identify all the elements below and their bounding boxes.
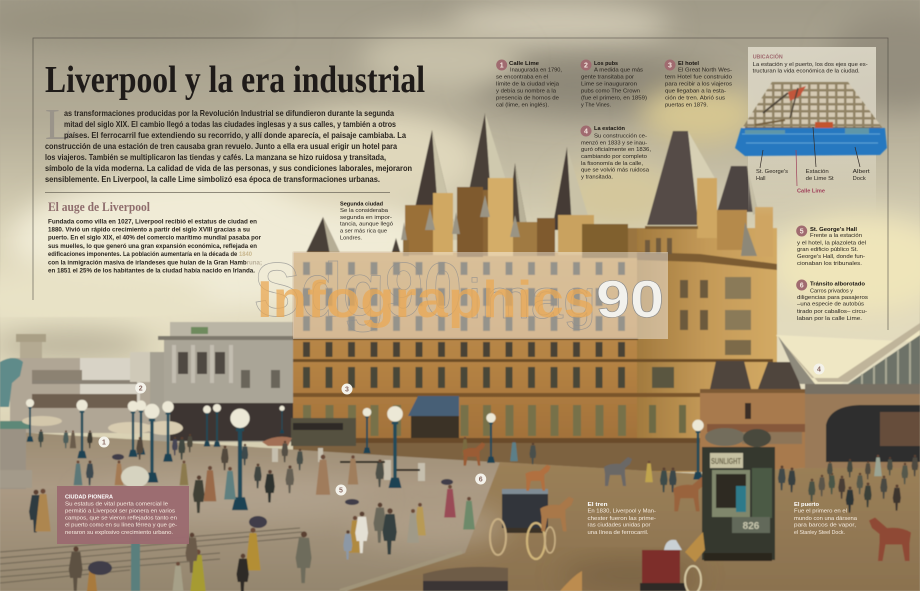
callout: Ciudad pionera: CIUDAD PIONERA [65,494,113,500]
text block: Segunda ciudad [340,202,393,241]
note 1: Calle Lime: se encontraba en el [496,74,548,80]
note 2: Los pubs: gente transitaba por [581,74,634,80]
panel: Ubicación locator map: UBICACIÓN [753,52,783,60]
motor car top [423,567,508,591]
panel: Ubicación locator map: La estación y el puerto, los dos ejes que es- [753,62,868,68]
text block: Segunda ciudad: tancia, aunque llegó [340,222,393,228]
note 3: El hotel: para recibir a los viajeros [665,81,732,87]
badge 5: 5 [800,228,804,236]
carriage [490,489,555,559]
intro text block: países. El ferrocarril fue extendiendo su recorrido, y allí donde aparecía, el paisaje cambiaba. La [64,131,406,140]
note 1: Calle Lime: Inaugurada en 1790, [510,67,562,73]
note 4: La estación: cambiando por completo [581,154,647,160]
map labels: Dock [853,176,866,182]
note 6: Tránsito alborotado: –una especie de autobús [797,302,864,308]
watermark: imag [468,267,596,330]
note 3: El hotel: que llegaban a la esta- [665,88,726,94]
note 2: Los pubs: pubs como The Crown [581,88,640,94]
caption: El puerto: Fue el primero en el [794,509,847,515]
text block: Segunda ciudad: Londres. [340,235,362,241]
map labels: St. George's [756,169,788,175]
note 1: Calle Lime: límite de la ciudad vieja [496,81,560,87]
intro text block: mitad del siglo XIX. El cambio llegó a todas las ciudades inglesas y a sus calles, y también a otros [64,120,396,129]
far-left white building [10,334,150,433]
text block: El auge de Liverpool: en 1851 el 25% de los habitantes de la ciudad había nacido en Irlanda. [48,268,255,275]
caption: El tren: El tren [588,502,608,508]
callout: Ciudad pionera: el puerto como en su línea férrea y que ge- [65,523,177,529]
intro text block: construcción de una estación de tren causaba gran revuelo. Junto a ella era usual erigir un hotel para [45,142,397,151]
note 6: Tránsito alborotado [796,280,868,322]
note 4: La estación: La estación [594,126,626,132]
note 2: Los pubs: A medida que más [594,67,643,73]
text block: Segunda ciudad: Se la consideraba [340,208,389,214]
map leader lines [760,127,860,186]
caption: El puerto: el Stanley Steel Dock. [794,530,845,536]
caption: El tren [588,502,656,536]
map labels [756,169,870,195]
panel: Ubicación locator map [735,47,887,217]
note 3: El hotel: tern Hotel fue construido [665,74,732,80]
badge 4: 4 [584,128,588,136]
cart with boxes [560,532,705,591]
street lamps [26,399,704,510]
text block: Segunda ciudad: Segunda ciudad [340,202,384,208]
badge 1: 1 [500,62,504,70]
note 5: St. George's Hall: Frente a la estación [810,233,862,239]
note 2: Los pubs: Lime se inauguraron [581,81,637,87]
text block: El auge de Liverpool: edificaciones imponentes. La población aumentaría en la década de 1840 [48,251,252,258]
railway station shed [776,323,920,478]
note 6: Tránsito alborotado: Carros privados y [810,288,853,294]
foreground lamp [121,466,149,591]
note 6: Tránsito alborotado: tirado por caballos– circu- [797,309,867,315]
note 5: St. George's Hall: George's Hall, donde fun- [797,254,865,260]
note 1: Calle Lime: cal (lime, en inglés). [496,103,549,109]
note 2: Los pubs: Los pubs [594,61,618,67]
text block: El auge de Liverpool: con la inmigración masiva de irlandeses que huían de la Gran Hambruna; [48,259,262,266]
umbrellas [88,454,453,575]
right wing and dormers [700,361,807,472]
drop cap: L [45,100,72,149]
scene number markers: 4 [817,366,821,374]
caption: El puerto: mundo con una dársena [794,516,857,522]
text block: El auge de Liverpool: 1880. Vivió un rápido crecimiento a partir del siglo XVIII gracias a su [48,226,250,234]
text block: Segunda ciudad: segunda en impor- [340,215,392,221]
caption: El puerto: El puerto [794,502,820,508]
note 6: Tránsito alborotado: laban por la calle Lime. [797,316,863,322]
intro text block: los viajeros. También se multiplicaron las tiendas y cafés. La manzana se hizo ruidosa y transitada, [45,153,386,162]
note 5: St. George's Hall: cionaban los tribunales. [797,261,863,267]
note 4: La estación: Su construcción ce- [594,133,647,139]
scene number markers: 6 [479,476,483,484]
callout: Ciudad pionera: campos, que se vieron reflejados tanto en [65,516,177,522]
caption: El tren: una línea de ferrocarril. [588,530,648,536]
note 3: El hotel [664,60,732,109]
caption: El tren: ras ciudades unidas por [588,523,651,529]
note 4: La estación: guró oficialmente en 1836, [581,147,652,153]
map labels: Estación [806,169,829,175]
map labels: de Lime St [806,176,834,182]
text block: Segunda ciudad: a ser más rica que [340,228,387,234]
note 2: Los pubs: (fue el primero, en 1859) [581,95,647,101]
tram [702,428,775,561]
callout: Ciudad pionera: neraron su explosivo crecimiento urbano. [65,530,173,536]
note 6: Tránsito alborotado: Tránsito alborotado [810,282,866,288]
watermark [254,248,668,339]
callout: Ciudad pionera [57,486,189,544]
badge 2: 2 [584,62,588,70]
note 4: La estación [580,126,652,181]
map labels: Hall [756,176,765,182]
intro text block: sensiblemente. En Liverpool, la calle Lime simbolizó esa época de transformaciones urbanas. [45,175,380,184]
note 2: Los pubs [580,60,647,109]
scene number markers: 1 [102,440,106,446]
note 1: Calle Lime: presencia de hornos de [496,95,559,101]
horses [463,442,911,561]
text block: El auge de Liverpool [48,218,262,275]
note 4: La estación: que se volvió más ruidosa [581,168,650,174]
panel: Ubicación locator map: tructuran la vida económica de la ciudad. [753,68,860,74]
hotel facade [291,178,777,472]
ground [0,431,920,591]
tram: SUNLIGHT [711,457,741,466]
callout: Ciudad pionera: permitió a Liverpool ser pionera en varios [65,509,175,515]
map labels: Calle Lime [797,189,826,195]
porch [408,396,459,438]
tower block [637,178,777,472]
watermark: Infographics [257,271,595,329]
note 3: El hotel: El Great North Wes- [678,67,732,73]
note 5: St. George's Hall: St. George's Hall [810,227,857,233]
watermark: 90 [596,271,664,329]
scene number markers: 2 [139,386,143,392]
note 5: St. George's Hall: y el hotel, la plazoleta del [797,240,866,246]
caption: El tren: chester fueron las prime- [588,516,656,522]
note 2: Los pubs: y The Vines. [581,103,611,109]
note 4: La estación: y transitada. [581,175,613,181]
scene number markers [98,364,824,496]
note 3: El hotel: puertas en 1879. [665,103,708,109]
badge 6: 6 [800,282,804,290]
note 1: Calle Lime: Calle Lime [509,61,539,67]
intro text block [45,100,412,184]
watermark: Sdg90 [254,248,462,333]
tram: 826 [743,521,760,532]
statue and pedestal [0,358,32,489]
neoclassical building [150,322,295,442]
callout: Ciudad pionera: Su estatus de vital puerta comercial le [65,502,168,508]
note 1: Calle Lime: y debía su nombre a la [496,88,557,94]
title: Liverpool y la era industrial [45,59,425,101]
intro text block: símbolo de la vida moderna. La calidad de vida de las personas, y sus condiciones laborales, mejoraron [45,164,412,173]
caption: El puerto [794,502,857,536]
hotel spires [305,113,758,255]
plaza steps [0,528,304,583]
badge 3: 3 [668,62,672,70]
map of Liverpool [735,82,887,156]
white carriages and distant horses [22,416,425,481]
note 6: Tránsito alborotado: diligencias para pasajeros [797,295,868,301]
heading: El auge de Liverpool: El auge de Liverpool [48,200,150,214]
note 3: El hotel: ción de tren. Abrió sus [665,95,725,101]
note 4: La estación: menzó en 1833 y se inau- [581,140,647,146]
frame [33,38,888,330]
scene number markers: 5 [339,488,343,494]
crowds [29,429,918,591]
note 5: St. George's Hall [796,226,866,267]
text block: El auge de Liverpool: puerto. En el siglo XIX, el 40% del comercio marítimo mundial pasaba por [48,235,261,242]
note 4: La estación: la fisonomía de la calle, [581,161,644,167]
map labels: Albert [853,169,870,175]
scene number markers: 3 [345,386,349,394]
caption: El tren: En 1830, Liverpool y Man- [588,509,656,515]
intro text block: as transformaciones producidas por la Revolución Industrial se difundieron durante la segunda [64,109,394,118]
note 5: St. George's Hall: gran edificio público St. [797,247,858,253]
text block: El auge de Liverpool: sus muelles, lo que generó una gran expansión económica, reflejada en [48,243,257,250]
note 3: El hotel: El hotel [678,61,699,67]
text block: El auge de Liverpool: Fundada como villa en 1027, Liverpool recibió el estatus de ciudad en [48,218,257,225]
note 1: Calle Lime [496,60,562,109]
caption: El puerto: para barcos de vapor, [794,523,856,529]
small grey pinnacles [401,195,520,240]
